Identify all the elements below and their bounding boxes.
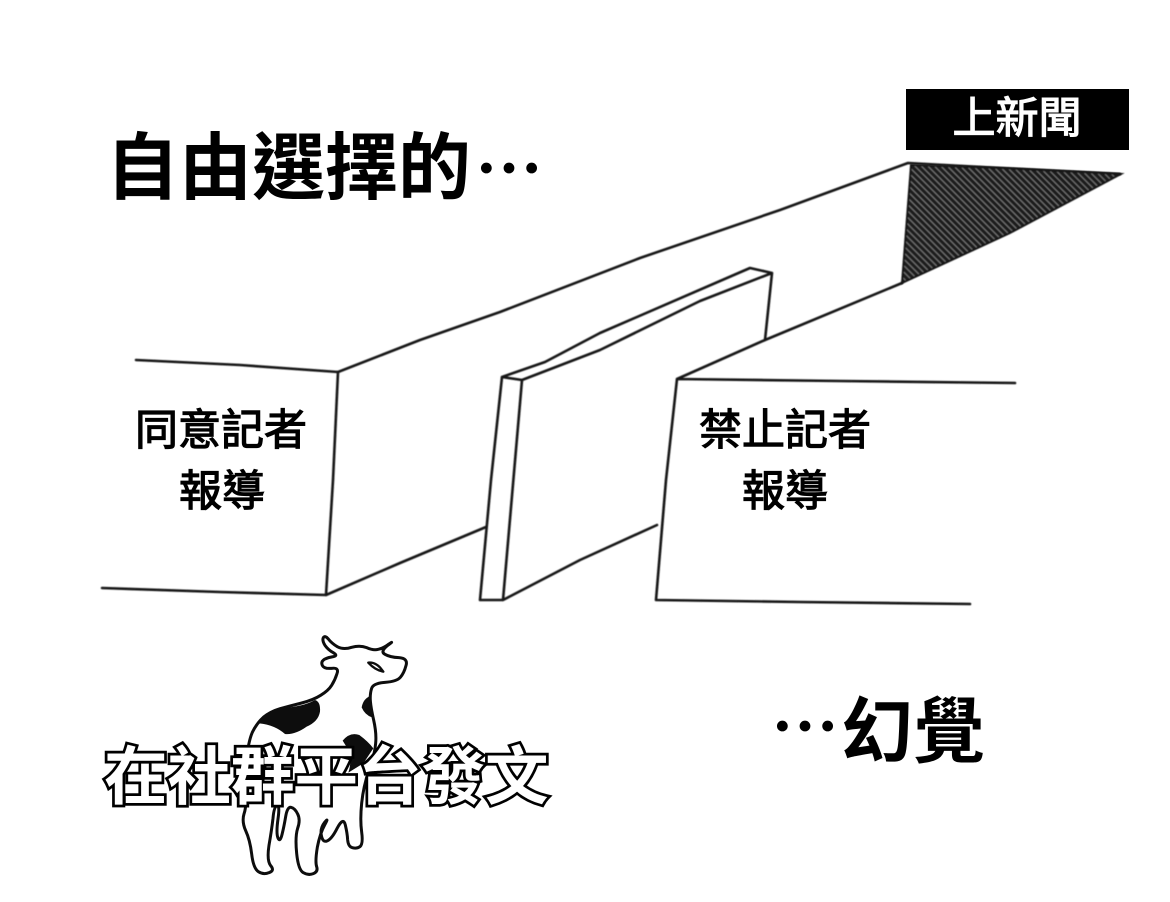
illusion text: 幻覺 xyxy=(841,693,985,773)
title ellipsis: … xyxy=(475,115,543,214)
dark hatched exit triangle xyxy=(902,165,1121,283)
label: news exit xyxy=(906,89,1129,150)
maze walls drawing xyxy=(102,163,1120,604)
right wall xyxy=(656,283,1015,604)
caption over cow: 在社群平台發文 xyxy=(104,743,548,813)
bottom right ellipsis: … xyxy=(771,673,839,772)
label: right wall xyxy=(699,407,871,516)
cow markings xyxy=(259,696,373,773)
long back wall ridge xyxy=(338,163,1120,372)
cow eye xyxy=(368,663,383,672)
left wall xyxy=(102,360,486,595)
label: news exit: 上新聞 xyxy=(952,95,1082,143)
label: left wall: 同意記者 xyxy=(135,407,307,455)
label: right wall: 報導 xyxy=(742,468,828,516)
icon: cow xyxy=(243,637,406,874)
central slab xyxy=(480,268,772,600)
label: right wall: 禁止記者 xyxy=(699,407,871,455)
label: left wall: 報導 xyxy=(179,468,265,516)
title: 自由選擇的 xyxy=(106,128,471,209)
label: left wall xyxy=(135,407,307,516)
